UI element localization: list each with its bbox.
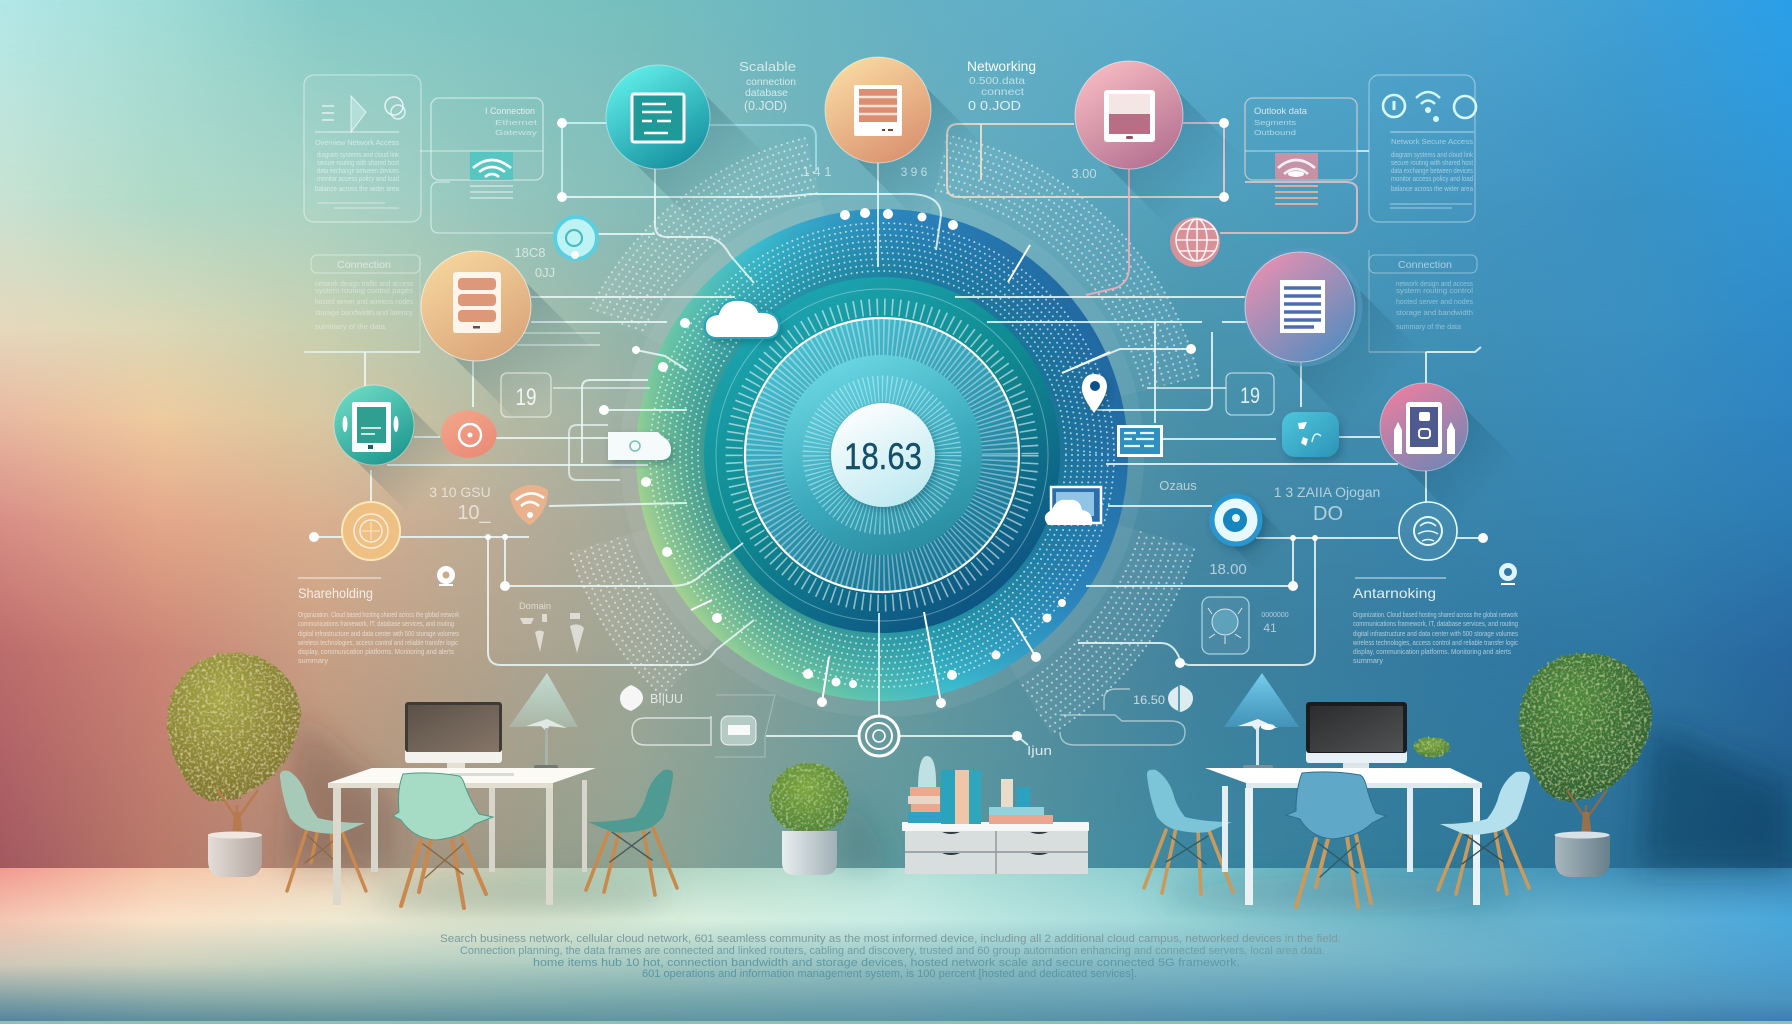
right desk scene <box>1144 702 1530 907</box>
left desk scene <box>280 702 677 908</box>
icon: bottom target <box>859 716 899 756</box>
left lamp light cone <box>509 673 578 727</box>
panel: left lower text card <box>311 255 420 352</box>
text block: left lower: digital infrastructure and data center with 500 storage volumes <box>298 629 459 638</box>
text block: left lower: summary <box>298 656 328 665</box>
panel: top left wifi card <box>420 98 555 233</box>
icon: teal document circle <box>606 65 710 169</box>
panel: top right text card: Network Secure Access <box>1391 139 1474 146</box>
panel: top right wifi card <box>1245 98 1369 204</box>
label: Scalable <box>739 59 796 113</box>
footer paragraph: Search business network, cellular cloud network, 601 seamless community as the most informed device, including all 2 additional cloud campus, networked devices in the field. <box>440 933 1341 945</box>
panel: right lower text card: system routing control <box>1396 288 1473 295</box>
right lamp light cone <box>1224 673 1299 727</box>
text block: right lower: digital infrastructure and data center with 500 storage volumes <box>1353 629 1518 638</box>
panel: top right text card: balance across the wider area <box>1391 186 1473 193</box>
panel: top left text card: data exchange between devices <box>317 168 399 175</box>
bottom right callout <box>1027 685 1193 758</box>
right lamp <box>1238 719 1278 769</box>
books <box>908 756 1053 824</box>
icon: photo cloud <box>1045 487 1101 525</box>
box: 19 right <box>1226 373 1274 415</box>
small numeric labels: 0000000 <box>1261 612 1289 619</box>
icon: left small pin <box>437 566 455 585</box>
central dial <box>620 193 1144 717</box>
bottom right callout: Ijun <box>1027 743 1052 758</box>
panel: left lower text card: storage bandwidth and latency <box>315 310 414 317</box>
left front chair <box>393 773 493 908</box>
label: Networking: 0.500.data <box>969 76 1026 87</box>
panel: left lower text card: network design traffic and access <box>315 281 413 288</box>
small numeric labels: 1 4 1 <box>803 164 831 179</box>
text block: right lower: communications framework, IT, database services, and routing <box>1353 619 1518 628</box>
icon: map pin <box>1082 374 1107 413</box>
text block: right lower: summary <box>1353 656 1383 665</box>
middle plant <box>770 763 849 875</box>
icon: wifi badge <box>510 485 548 525</box>
left desk legs back <box>371 780 587 872</box>
small numeric labels: 18.00 <box>1209 561 1247 578</box>
label: Networking: Networking <box>967 58 1036 74</box>
panel: top right text card: diagram systems and cloud link <box>1391 152 1473 159</box>
right chair near drawers <box>1144 770 1233 894</box>
panel: top left text card: Overview Network Access <box>315 140 400 147</box>
left lamp <box>526 719 567 769</box>
small numeric labels: 10_ <box>457 502 492 524</box>
panel: top left text card: secure routing with shared host <box>317 160 399 167</box>
connector lines <box>304 123 1483 745</box>
bottom left callout: BI|UU <box>650 691 683 706</box>
panel: top right wifi card: Outlook data <box>1254 106 1308 117</box>
panel: right lower text card: summary of the data <box>1396 324 1461 331</box>
small numeric labels: DO <box>1313 503 1343 525</box>
panel: top right wifi card: Segments <box>1254 118 1296 127</box>
footer paragraph: 601 operations and information management system, is 100 percent [hosted and dedicated services]. <box>642 968 1137 980</box>
label: Networking: 0 0.JOD <box>968 98 1021 113</box>
label: Networking <box>967 58 1036 113</box>
icon: salmon target <box>441 410 497 458</box>
connector end dots <box>309 118 1488 741</box>
panel: top left text card: balance across the wider area <box>315 186 399 193</box>
panel: top right wifi card: Outbound <box>1254 128 1296 137</box>
small numeric labels: 41 <box>1263 621 1277 635</box>
right desk top <box>1205 768 1482 905</box>
big plant right <box>1519 653 1652 877</box>
small numeric labels <box>429 164 1380 635</box>
text block: right lower <box>1352 578 1518 665</box>
left right chair <box>586 770 677 895</box>
bottom right callout: 16.50 <box>1133 693 1165 707</box>
text block: left lower <box>297 578 459 665</box>
icon: yellow fingerprint <box>342 502 400 560</box>
panel: right lower text card: Connection <box>1398 260 1452 271</box>
icon: pink list circle <box>1245 250 1360 364</box>
cabinet with books <box>902 756 1089 874</box>
box: 19 left: 19 <box>516 384 536 411</box>
panel: top left text card: monitor access policy and load <box>317 176 399 183</box>
label: Scalable: (0.JOD) <box>744 98 787 113</box>
box: shield <box>1202 597 1249 654</box>
mini map panel: Domain <box>519 601 551 611</box>
small numeric labels: 1 3 ZAIIA Ojogan <box>1274 484 1380 500</box>
label: Scalable: Scalable <box>739 59 796 74</box>
right monitor <box>1306 702 1407 769</box>
panel: left lower text card: summary of the data <box>315 324 385 331</box>
box: 19 left <box>501 373 551 417</box>
small numeric labels: Ozaus <box>1159 478 1197 493</box>
small numeric labels: 3 9 6 <box>901 165 928 179</box>
icon: mint device circle <box>334 385 414 465</box>
icon: orange server circle <box>421 251 531 361</box>
footer paragraph <box>440 933 1341 980</box>
right far chair <box>1438 772 1530 894</box>
icon: pink tablet circle <box>1075 61 1183 169</box>
panel: top right text card: monitor access policy and load <box>1391 176 1473 183</box>
center value <box>831 403 935 507</box>
right front chair <box>1286 772 1386 907</box>
floor <box>0 868 1792 1024</box>
text block: left lower: display, communication platforms. Monitoring and alerts <box>298 647 454 656</box>
small numeric labels: 18C8 <box>514 245 546 260</box>
label: Networking: connect <box>981 87 1024 98</box>
center value: 18.63 <box>844 436 922 477</box>
text block: left lower: Organization. Cloud based hosting shared across the global network <box>298 610 459 619</box>
icon: chat tile <box>1282 412 1339 457</box>
panel: top left wifi card: Gateway <box>495 128 537 137</box>
icon: right small pin <box>1499 563 1517 584</box>
text block: right lower: display, communication platforms. Monitoring and alerts <box>1353 647 1511 656</box>
long icon shadows <box>374 110 1490 557</box>
small numeric labels: 0JJ <box>535 265 555 280</box>
panel: right lower text card <box>1369 250 1477 352</box>
small numeric labels: 3.00 <box>1071 166 1097 181</box>
icon: orange document circle <box>825 57 931 163</box>
footer paragraph: Connection planning, the data frames are connected and linked routers, cabling and discovery, trusted and 60 group automation enhancing and connected servers, local area data. <box>460 945 1325 957</box>
icon: cloud <box>705 300 779 338</box>
panel: top right text card: secure routing with shared host <box>1391 160 1473 167</box>
dial spokes <box>691 245 1110 703</box>
panel: right lower text card: hosted server and nodes <box>1396 299 1473 306</box>
panel: left lower text card: Connection <box>337 260 391 271</box>
text block: right lower: wireless technologies, access control and reliable transfer logic <box>1352 638 1518 647</box>
panel: top left wifi card: I Connection <box>485 106 535 117</box>
panel: top left wifi card: Ethernet <box>495 118 538 127</box>
icon: blue target <box>1212 496 1260 544</box>
icon: teal pin badge <box>555 217 597 259</box>
box: 19 right: 19 <box>1240 383 1260 408</box>
dial white dots <box>641 208 1066 688</box>
panel: right lower text card: storage and bandwidth <box>1396 310 1473 317</box>
small numeric labels: 3 10 GSU <box>429 484 491 500</box>
icon: white tag <box>608 432 671 460</box>
dotted arc bands <box>570 134 1200 734</box>
left monitor <box>405 702 502 769</box>
icon: pink device circle <box>1380 383 1468 471</box>
panel: top right text card <box>1369 75 1476 222</box>
panel: left lower text card: hosted server and wireless nodes <box>315 299 413 306</box>
icon: globe <box>1170 217 1220 267</box>
icon: network panel <box>1117 425 1163 457</box>
text block: left lower: wireless technologies, access control and reliable transfer logic <box>297 638 458 647</box>
icon: brain circle <box>1399 502 1457 560</box>
label: Scalable: connection <box>746 77 796 88</box>
small shrub <box>1414 737 1450 757</box>
text block: right lower: Antarnoking <box>1353 585 1436 601</box>
panel: left lower text card: system routing control pages <box>315 288 414 295</box>
mini map panel <box>519 601 584 653</box>
text block: left lower: communications framework, IT, database services, and routing <box>298 619 454 628</box>
panel: top right text card: data exchange between devices <box>1391 168 1473 175</box>
big plant left <box>167 653 300 877</box>
panel: top left text card <box>304 75 421 222</box>
left far chair <box>280 771 366 891</box>
furniture shadows <box>285 715 1792 915</box>
footer paragraph: home items hub 10 hot, connection bandwidth and storage devices, hosted network scale and secure connected 5G framework. <box>533 957 1240 969</box>
panel: top left text card: diagram systems and cloud link <box>317 152 399 159</box>
panel: right lower text card: network design and access <box>1396 281 1473 288</box>
text block: left lower: Shareholding <box>298 585 373 601</box>
bottom left callout <box>620 685 775 757</box>
left desk top <box>328 768 596 905</box>
label: Scalable: database <box>745 88 788 99</box>
right desk back legs <box>1222 786 1413 872</box>
text block: right lower: Organization. Cloud based hosting shared across the global network <box>1353 610 1518 619</box>
